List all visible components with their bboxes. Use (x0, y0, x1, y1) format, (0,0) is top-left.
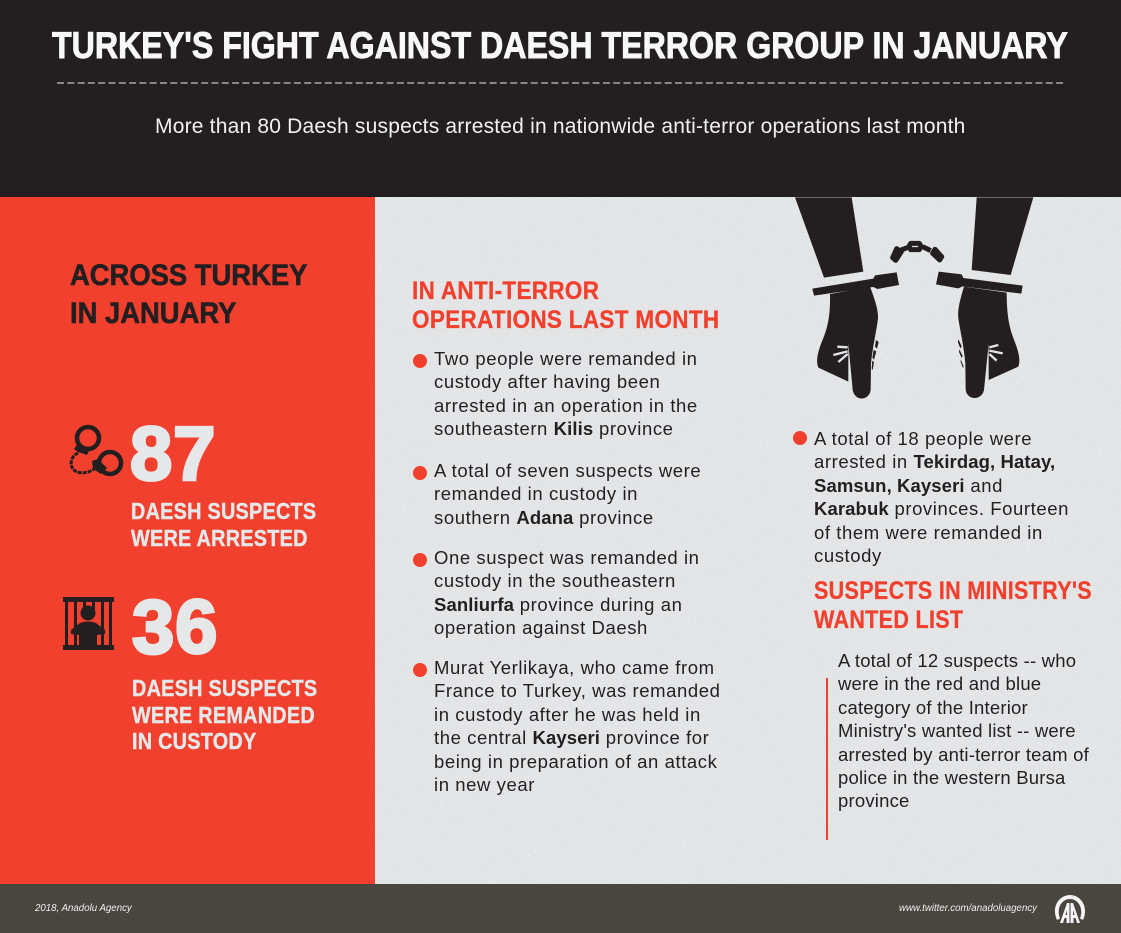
stat label: remanded: WERE REMANDED (132, 702, 315, 728)
panel: provinces and wanted list (793, 428, 1092, 840)
bullet: Kayseri: France to Turkey, was remanded (434, 680, 720, 701)
right arm (972, 197, 1033, 275)
bullet: Tekirdag etc: of them were remanded in (814, 522, 1043, 543)
red rule (826, 678, 828, 840)
section heading: IN ANTI-TERROR (412, 277, 599, 305)
panel heading: IN JANUARY (70, 297, 236, 330)
stat label: remanded (132, 675, 317, 754)
panel heading: ACROSS TURKEY (70, 259, 307, 292)
wanted list text: province (838, 790, 910, 811)
section heading (412, 277, 719, 334)
bullet: Adana: southern Adana province (434, 507, 654, 528)
panel: operations column (412, 277, 720, 795)
credit: 2018, Anadolu Agency (35, 903, 132, 914)
wanted list text: were in the red and blue (838, 673, 1041, 694)
right hand (958, 287, 1019, 398)
wanted list text (838, 650, 1089, 811)
panel: red statistics (0, 197, 375, 884)
section heading: SUSPECTS IN MINISTRY'S (814, 577, 1092, 605)
bullet: Kayseri: in new year (434, 774, 535, 795)
bullet: Tekirdag etc (793, 428, 1069, 566)
left hand (817, 287, 878, 399)
bullet: Kilis: southeastern Kilis province (434, 418, 674, 439)
bullet: Sanliurfa: Sanliurfa province during an (434, 594, 682, 615)
knuckle lines (833, 345, 1003, 362)
title: TURKEY'S FIGHT AGAINST DAESH TERROR GROUP IN JANUARY (52, 25, 1068, 66)
icon: prisoner behind bars (63, 597, 114, 650)
stat label: remanded: DAESH SUSPECTS (132, 675, 317, 701)
stat label: arrested: DAESH SUSPECTS (131, 498, 316, 524)
bullet: Sanliurfa: custody in the southeastern (434, 570, 676, 591)
header band (0, 0, 1121, 197)
footer band (0, 884, 1121, 933)
left arm (795, 197, 863, 278)
bullet: Kilis (413, 348, 698, 439)
bullet: Sanliurfa: operation against Daesh (434, 617, 648, 638)
bullet: Kilis: custody after having been (434, 371, 660, 392)
bullet: Kayseri: the central Kayseri province for (434, 727, 709, 748)
right cuff (936, 272, 1023, 294)
bullet: Kayseri (413, 657, 720, 795)
stat label: remanded: IN CUSTODY (132, 728, 257, 754)
stat: 36: 36 (132, 585, 218, 670)
stat: 87: 87 (130, 412, 216, 497)
bullet: Sanliurfa: One suspect was remanded in (434, 547, 700, 568)
stat label: arrested (130, 498, 316, 551)
bullet: Tekirdag etc: arrested in Tekirdag, Hatay, (814, 451, 1055, 472)
wanted list text: Ministry's wanted list -- were (838, 720, 1076, 741)
icon: Anadolu Agency logo (1054, 895, 1086, 923)
left cuff (812, 272, 899, 296)
bullet: Adana: A total of seven suspects were (434, 460, 701, 481)
bullet: Tekirdag etc: A total of 18 people were (814, 428, 1032, 449)
bullet: Kayseri: Murat Yerlikaya, who came from (434, 657, 715, 678)
bullet: Tekirdag etc: Samsun, Kayseri and (814, 475, 1003, 496)
bullet: Kayseri: being in preparation of an attack (434, 751, 717, 772)
icon: handcuffs (70, 424, 124, 476)
twitter link text: www.twitter.com/anadoluagency (899, 903, 1037, 914)
bullet: Adana: remanded in custody in (434, 483, 638, 504)
section heading: WANTED LIST (814, 606, 963, 634)
panel heading (70, 259, 308, 330)
bullet: Kayseri: in custody after he was held in (434, 704, 701, 725)
wanted list text: police in the western Bursa (838, 767, 1066, 788)
stat label: arrested: WERE ARRESTED (131, 525, 308, 551)
section heading (814, 577, 1092, 634)
bullet: Tekirdag etc: Karabuk provinces. Fourteen (814, 498, 1069, 519)
subtitle: More than 80 Daesh suspects arrested in nationwide anti-terror operations last month (155, 115, 966, 138)
wanted list text: category of the Interior (838, 697, 1028, 718)
bullet: Adana (413, 460, 701, 528)
bullet: Kilis: arrested in an operation in the (434, 395, 698, 416)
bullet: Sanliurfa (413, 547, 700, 638)
bullet: Tekirdag etc: custody (814, 545, 882, 566)
section heading: OPERATIONS LAST MONTH (412, 306, 719, 334)
icon: hands breaking free of chain (795, 197, 1034, 398)
wanted list text: arrested by anti-terror team of (838, 744, 1089, 765)
bullet: Kilis: Two people were remanded in (434, 348, 698, 369)
wanted list text: A total of 12 suspects -- who (838, 650, 1076, 671)
broken chain (893, 243, 942, 260)
